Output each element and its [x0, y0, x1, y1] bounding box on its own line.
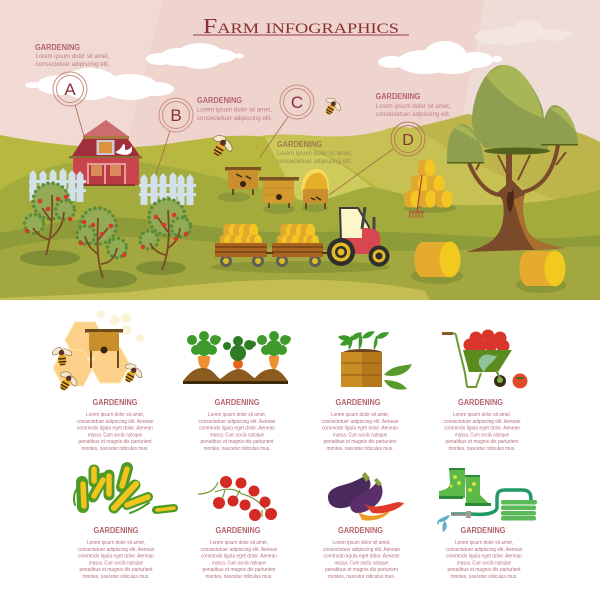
- text block: Lorem ipsum dolor sit amet,: [331, 412, 389, 418]
- text block: commodo ligula eget dolor. Aenean: [77, 426, 153, 432]
- text block: [198, 398, 276, 452]
- icon: wheelbarrow of tomatoes: [442, 330, 528, 388]
- icon: cherry tomato branch: [198, 476, 277, 521]
- text block: consectetuer adipiscing elit. Aenean: [200, 547, 278, 553]
- panel: beekeeping: [50, 310, 154, 452]
- text block: Lorem ipsum dolor sit amet,: [455, 540, 513, 546]
- text block: massa. Cum sociis natoque: [333, 432, 387, 438]
- text block: penatibus et magnis dis parturient: [200, 439, 274, 445]
- tractor: [327, 207, 390, 266]
- panel: cherry tomatoes: [198, 476, 278, 580]
- text block: Lorem ipsum dolor sit amet,: [332, 540, 391, 546]
- beehive 2: [259, 177, 299, 214]
- text block: [78, 526, 154, 580]
- text block: GARDENING: [94, 526, 138, 535]
- fence right: [139, 172, 196, 205]
- panel: crate: [322, 330, 412, 452]
- text block: massa. Cum sociis natoque: [210, 432, 264, 438]
- panel: carrots: [183, 331, 291, 452]
- icon: garden hose and water: [437, 490, 537, 532]
- callout C: Lorem ipsum dolor sit amet,: [277, 150, 352, 157]
- text block: montes, nascetur ridiculus mus.: [328, 574, 395, 580]
- callout A: [35, 43, 110, 136]
- text block: Lorem ipsum dolor sit amet,: [453, 412, 511, 418]
- text block: massa. Cum sociis natoque: [455, 432, 509, 438]
- callout B: GARDENING: [197, 96, 242, 105]
- text block: massa. Cum sociis natoque: [89, 560, 143, 566]
- text block: montes, nascetur ridiculus mus.: [82, 446, 149, 452]
- text block: penatibus et magnis dis parturient: [446, 439, 519, 445]
- text block: Lorem ipsum dolor sit amet,: [86, 412, 144, 418]
- text block: consectetuer adipiscing elit. Aenean: [76, 419, 154, 425]
- title: Farm infographics: [203, 14, 399, 38]
- cloud B: [146, 43, 244, 69]
- callout A: A: [64, 80, 76, 99]
- text block: Lorem ipsum dolor sit amet,: [210, 540, 268, 546]
- text block: GARDENING: [458, 398, 503, 407]
- text block: penatibus et magnis dis parturient: [202, 567, 276, 573]
- bee flying left: [205, 130, 238, 162]
- callout B: consectetuer adipiscing elit.: [197, 115, 272, 122]
- beehive 3: [301, 169, 329, 212]
- callout C: C: [291, 93, 303, 112]
- panel: wheelbarrow: [442, 330, 528, 452]
- callout B: Lorem ipsum dolor sit amet,: [197, 106, 272, 114]
- text block: penatibus et magnis dis parturient: [448, 567, 521, 573]
- icon: corn cobs: [74, 468, 174, 513]
- text block: [444, 398, 520, 452]
- callout D: Lorem ipsum dolor sit amet,: [376, 103, 451, 110]
- callout A: consectetuer adipiscing elit.: [36, 61, 110, 68]
- text block: GARDENING: [214, 398, 260, 407]
- text block: penatibus et magnis dis parturient: [78, 439, 152, 445]
- text block: montes, nascetur ridiculus mus.: [448, 446, 516, 452]
- text block: penatibus et magnis dis parturient: [325, 567, 398, 573]
- panel: corn: [74, 468, 174, 580]
- icon: bee 3: [118, 359, 147, 388]
- text block: consectetuer adipiscing elit. Aenean: [444, 419, 520, 425]
- text block: montes, nascetur ridiculus mus.: [326, 446, 394, 452]
- barn: [69, 120, 142, 186]
- callout C: GARDENING: [277, 140, 322, 149]
- text block: massa. Cum sociis natoque: [212, 560, 266, 566]
- text block: GARDENING: [92, 398, 138, 407]
- text block: massa. Cum sociis natoque: [334, 560, 388, 566]
- text block: massa. Cum sociis natoque: [457, 560, 511, 566]
- cloud A: [25, 68, 174, 100]
- text block: consectetuer adipiscing elit. Aenean: [323, 547, 400, 553]
- text block: GARDENING: [216, 526, 260, 535]
- text block: massa. Cum sociis natoque: [88, 432, 142, 438]
- text block: commodo ligula eget dolor. Aenean: [322, 426, 398, 432]
- text block: commodo ligula eget dolor. Aenean: [199, 426, 275, 432]
- callout C: consectetuer adipiscing elit.: [277, 158, 352, 165]
- text block: commodo ligula eget dolor. Aenean: [444, 426, 520, 432]
- text block: commodo ligula eget dolor. Aenean: [324, 554, 400, 560]
- callout D: D: [402, 132, 414, 149]
- apple tree 2: [77, 208, 137, 288]
- text block: GARDENING: [336, 398, 380, 407]
- panel: boots and hose: [437, 468, 537, 580]
- text block: penatibus et magnis dis parturient: [80, 567, 153, 573]
- text block: montes, nascetur ridiculus mus.: [206, 574, 273, 580]
- icon: carrots in soil: [183, 331, 291, 384]
- fence left: [29, 168, 86, 202]
- callout B: [156, 96, 272, 174]
- bee flying right: [319, 94, 345, 119]
- text block: commodo ligula eget dolor. Aenean: [446, 554, 522, 560]
- text block: Lorem ipsum dolor sit amet,: [87, 540, 145, 546]
- beehive 1: [218, 167, 261, 202]
- callout A: GARDENING: [35, 43, 80, 52]
- hay pyramid with rake: [404, 160, 456, 218]
- icon: eggplants and peppers: [328, 472, 404, 521]
- text block: consectetuer adipiscing elit. Aenean: [446, 547, 522, 553]
- text block: consectetuer adipiscing elit. Aenean: [322, 419, 398, 425]
- callout D: [329, 92, 451, 195]
- text block: [200, 526, 278, 580]
- callout D: consectetuer adipiscing elit.: [376, 111, 451, 118]
- cloud C: [378, 41, 502, 74]
- callout C: [260, 85, 352, 165]
- icon: rubber boots: [439, 468, 491, 506]
- hay roll left: [411, 242, 463, 284]
- text block: [76, 398, 154, 452]
- apple tree 1: [20, 183, 80, 266]
- icon: bee 1: [50, 345, 74, 367]
- callout D: GARDENING: [376, 92, 420, 101]
- text block: GARDENING: [338, 526, 383, 535]
- icon: beehive on honeycomb: [53, 310, 144, 386]
- text block: consectetuer adipiscing elit. Aenean: [78, 547, 154, 553]
- icon: seedling crate and peas: [338, 330, 412, 390]
- panel: eggplants: [323, 472, 404, 580]
- callout B: B: [170, 106, 182, 125]
- text block: Lorem ipsum dolor sit amet,: [208, 412, 266, 418]
- text block: montes, nascetur ridiculus mus.: [82, 574, 150, 580]
- text block: [322, 398, 398, 452]
- text block: penatibus et magnis dis parturient: [324, 439, 397, 445]
- text block: GARDENING: [460, 526, 506, 535]
- icon: bee 2: [53, 367, 82, 396]
- text block: commodo ligula eget dolor. Aenean: [78, 554, 154, 560]
- apple tree 3: [136, 199, 190, 275]
- text block: montes, nascetur ridiculus mus.: [204, 446, 271, 452]
- big tree: [447, 65, 578, 252]
- panel: farm landscape: [0, 0, 600, 300]
- text block: consectetuer adipiscing elit. Aenean: [198, 419, 276, 425]
- hay roll right: [516, 250, 566, 293]
- text block: [446, 526, 522, 580]
- text block: commodo ligula eget dolor. Aenean: [201, 554, 277, 560]
- hay wagons: [210, 224, 390, 273]
- cloud D: [475, 20, 572, 45]
- text block: [323, 526, 400, 580]
- text block: montes, nascetur ridiculus mus.: [450, 574, 518, 580]
- callout A: Lorem ipsum dolor sit amet,: [36, 53, 110, 60]
